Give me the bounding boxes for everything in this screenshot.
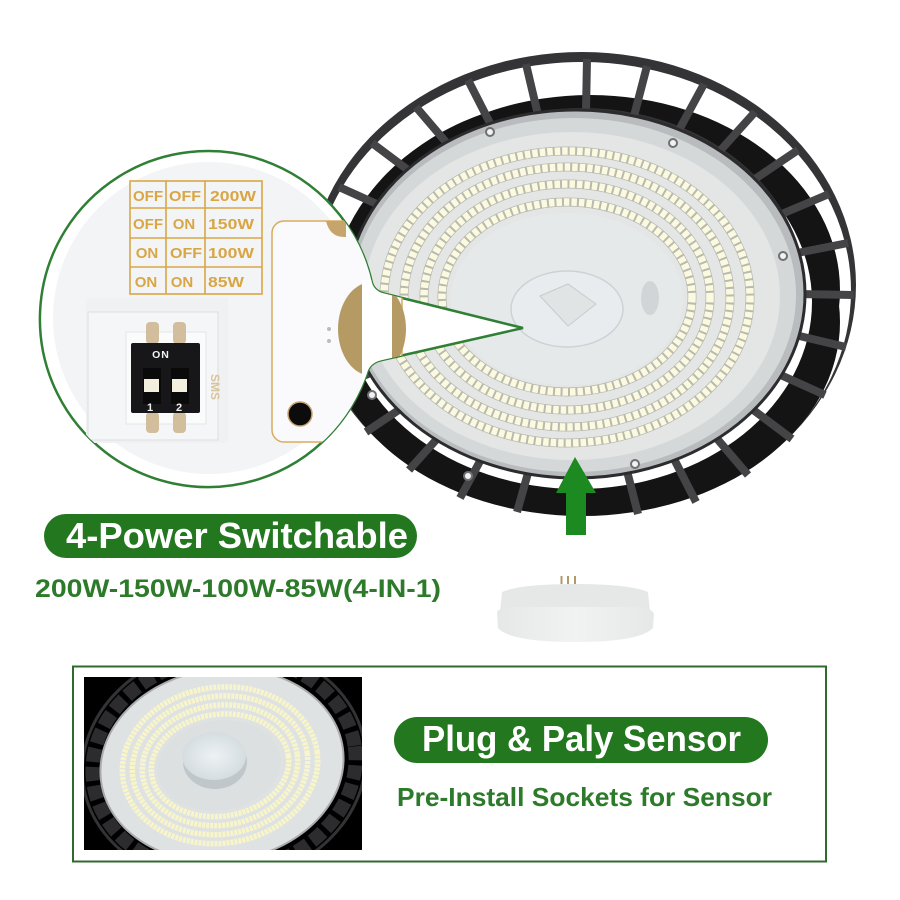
DIP switch: ON <box>152 349 170 361</box>
sensor on lamp <box>183 756 247 789</box>
power table: OFF <box>170 245 202 262</box>
lens screws <box>368 128 787 480</box>
power table: 200W <box>210 188 257 205</box>
DIP switch <box>131 322 200 433</box>
power table: OFF <box>169 188 201 205</box>
power table: OFF <box>133 188 163 205</box>
power table: 100W <box>208 245 255 262</box>
power table: ON <box>135 274 157 291</box>
white circuit board <box>272 221 402 442</box>
power table <box>130 181 262 294</box>
high bay lamp <box>327 52 856 516</box>
badge: 4-Power Switchable: 4-Power Switchable <box>66 515 408 556</box>
power table: OFF <box>133 216 163 233</box>
callout bubble <box>40 151 523 487</box>
DIP switch: 2 <box>176 402 182 414</box>
power table: ON <box>136 245 158 262</box>
heat sink housing <box>308 52 856 518</box>
sensor lower body <box>497 607 654 642</box>
badge: Plug & Paly Sensor: Plug & Paly Sensor <box>422 718 741 759</box>
magnified callout: DIP switch <box>40 151 523 487</box>
board background <box>53 162 330 474</box>
arrow: sensor into lamp <box>556 457 596 535</box>
SMS board mark: SMS <box>208 374 222 400</box>
DIP switch: 1 <box>147 402 153 414</box>
LED rings <box>384 151 750 443</box>
power table: 85W <box>208 274 245 291</box>
photo: lamp with sensor <box>84 677 362 850</box>
subheading: wattage options: 200W-150W-100W-85W(4-IN-1) <box>35 575 441 603</box>
panel frame <box>73 666 826 862</box>
board hole <box>288 402 312 426</box>
lamp centre plate <box>451 213 683 385</box>
subheading: pre-install sockets: Pre-Install Sockets for Sensor <box>397 782 772 812</box>
sensor module <box>497 576 654 642</box>
power table: ON <box>173 216 195 233</box>
sensor pins <box>560 576 576 584</box>
power table: 150W <box>208 216 255 233</box>
lens outer ring <box>347 110 805 478</box>
gold pad <box>338 282 406 376</box>
heat sink fins <box>310 59 854 515</box>
power table: ON <box>171 274 193 291</box>
sensor upper body <box>500 584 650 612</box>
clear switch housing <box>88 312 218 440</box>
panel: plug and play sensor <box>72 666 827 862</box>
heat sink slots <box>332 62 851 518</box>
